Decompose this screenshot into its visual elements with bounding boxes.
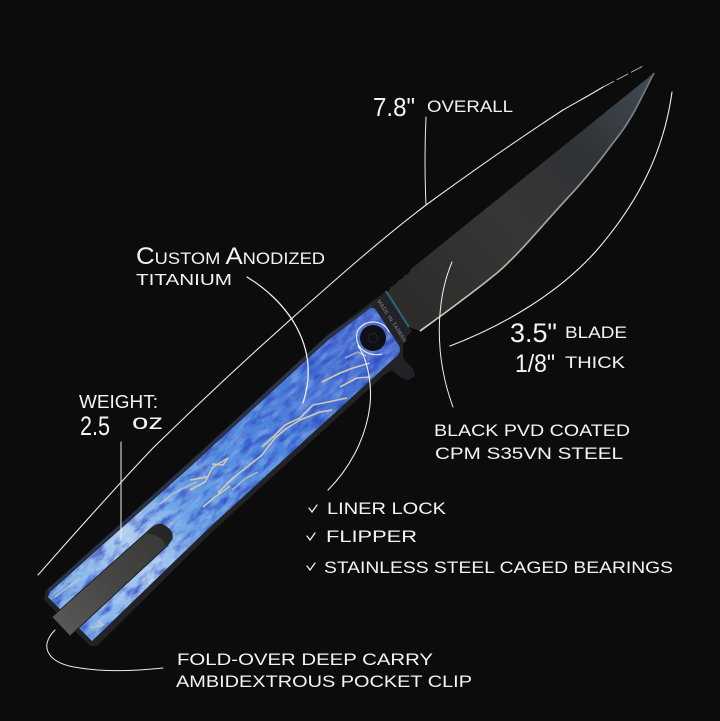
label: pocket clip: AMBIDEXTROUS POCKET CLIP	[176, 672, 472, 691]
label: custom anodized titanium: CUSTOM ANODIZED	[136, 243, 325, 270]
callout lines	[38, 65, 672, 671]
label: custom anodized titanium: TITANIUM	[136, 272, 232, 289]
label: blade steel	[434, 421, 630, 463]
feature: bearings: STAINLESS STEEL CAGED BEARINGS	[324, 558, 673, 577]
label: blade dimensions	[510, 318, 627, 378]
label: pocket clip	[176, 650, 472, 691]
anodized titanium handle	[48, 308, 400, 641]
label: weight: 2.5	[80, 411, 110, 441]
label: blade steel: BLACK PVD COATED	[434, 421, 630, 440]
icon: check	[307, 563, 315, 570]
pocket clip	[52, 524, 172, 636]
label: custom anodized titanium	[136, 243, 325, 289]
label: overall length: 7.8"	[373, 92, 415, 122]
knife illustration	[44, 72, 655, 646]
feature: liner lock: LINER LOCK	[327, 499, 447, 518]
line: overall length	[38, 65, 645, 575]
line: titanium	[247, 277, 308, 403]
label: overall length	[373, 92, 513, 122]
line: overall tick	[425, 117, 426, 205]
label: weight: oz	[132, 411, 163, 434]
label: blade dimensions: BLADE	[565, 323, 627, 342]
feature: flipper: FLIPPER	[326, 527, 417, 546]
line: blade length	[450, 92, 672, 346]
bolster accent	[386, 291, 409, 327]
label: blade dimensions: 1/8"	[515, 350, 555, 378]
label: blade dimensions: THICK	[565, 353, 626, 372]
line: lock features	[328, 322, 389, 490]
handle frame and flipper	[44, 291, 415, 646]
label: weight	[79, 392, 163, 441]
line: pocket clip	[47, 630, 163, 671]
icon: check	[307, 533, 315, 540]
label: blade steel: CPM S35VN STEEL	[435, 444, 623, 463]
label: blade dimensions: 3.5"	[510, 318, 557, 348]
line: blade coating	[439, 262, 453, 407]
pivot screw	[360, 325, 386, 351]
label: overall length: OVERALL	[427, 97, 513, 116]
icon: check	[309, 505, 317, 512]
clip slot	[146, 525, 172, 546]
label: weight: WEIGHT:	[79, 392, 158, 412]
feature list	[307, 499, 673, 577]
engraved bolster text: MADE IN TAIWAN	[375, 299, 407, 344]
label: pocket clip: FOLD-OVER DEEP CARRY	[177, 650, 433, 669]
upper frame highlight	[48, 306, 372, 591]
blade	[388, 73, 654, 331]
line: weight	[120, 442, 122, 540]
